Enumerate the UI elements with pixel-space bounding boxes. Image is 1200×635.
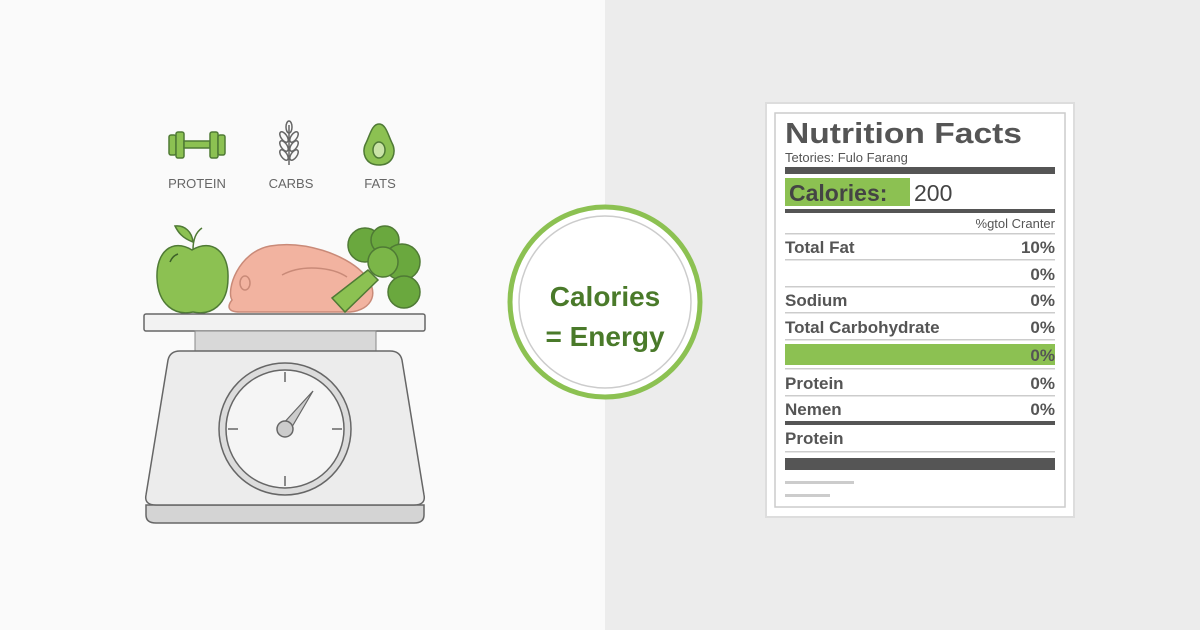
body bbox=[146, 505, 424, 523]
macro labels: FATS bbox=[364, 176, 396, 191]
nutrition label: 0% bbox=[1030, 400, 1055, 419]
nutrition label: Sodium bbox=[785, 291, 847, 310]
icon: wheat bbox=[278, 121, 300, 165]
center badge: Calories = Energy: = Energy bbox=[545, 321, 665, 352]
nutrition label: 0% bbox=[1030, 374, 1055, 393]
chicken bbox=[229, 245, 373, 312]
nutrition label: Nutrition Facts bbox=[785, 118, 1022, 150]
nutrition label: Protein bbox=[785, 374, 844, 393]
macro labels: CARBS bbox=[269, 176, 314, 191]
icon: dumbbell bbox=[169, 132, 225, 158]
dial bbox=[219, 363, 351, 495]
nutrition label: 0% bbox=[1030, 265, 1055, 284]
macro labels bbox=[168, 176, 396, 191]
broccoli bbox=[332, 226, 420, 312]
nutrition label: 10% bbox=[1021, 238, 1055, 257]
center badge: Calories = Energy: Calories bbox=[550, 281, 660, 312]
nutrition label: Total Carbohydrate bbox=[785, 318, 940, 337]
nutrition label: 0% bbox=[1030, 291, 1055, 310]
platform bbox=[144, 314, 425, 331]
macro labels: PROTEIN bbox=[168, 176, 226, 191]
nutrition label: %gtol Cranter bbox=[976, 216, 1056, 231]
nutrition label: 0% bbox=[1030, 318, 1055, 337]
nutrition label: Total Fat bbox=[785, 238, 855, 257]
nutrition label: 200 bbox=[914, 180, 952, 206]
apple bbox=[157, 226, 228, 313]
center badge: Calories = Energy bbox=[510, 207, 700, 397]
nutrition label: Nemen bbox=[785, 400, 842, 419]
icon: avocado bbox=[364, 124, 394, 165]
illustration: scale with food bbox=[144, 226, 425, 523]
nutrition label: Protein bbox=[785, 429, 844, 448]
nutrition label: Tetories: Fulo Farang bbox=[785, 150, 908, 165]
nutrition label: Calories: bbox=[789, 180, 887, 206]
nutrition label bbox=[766, 103, 1074, 517]
nutrition label: 0% bbox=[1030, 346, 1055, 365]
